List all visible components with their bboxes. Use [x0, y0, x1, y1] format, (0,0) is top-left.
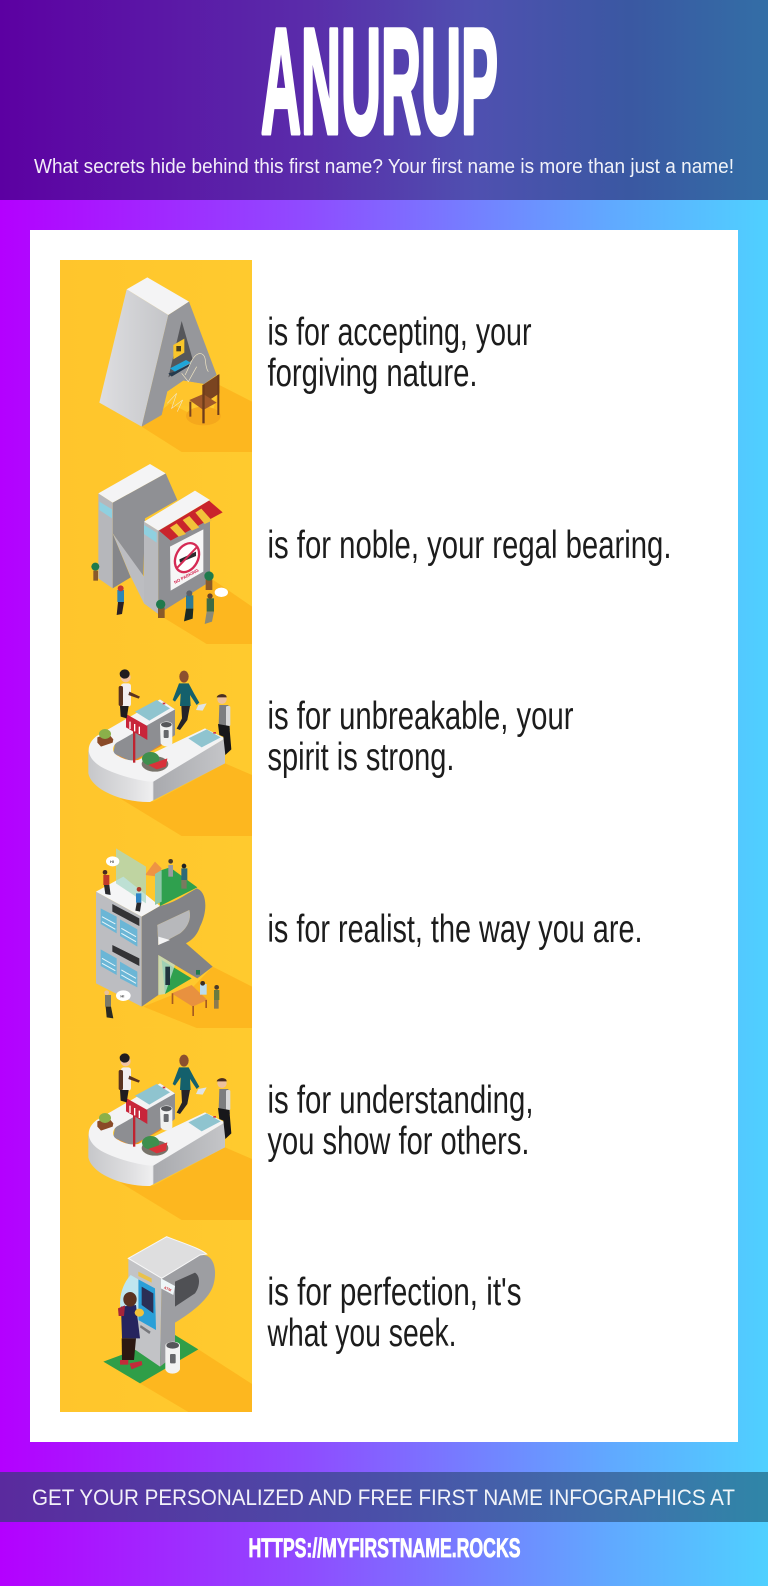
white content panel — [30, 230, 738, 1442]
tile: letter P: ATM — [163, 1286, 172, 1292]
text: A line: is for accepting, your — [268, 311, 532, 354]
tile: letter U — [60, 644, 252, 836]
text: A line — [268, 311, 532, 395]
text: U line 2: is for understanding, — [268, 1079, 534, 1122]
tile: letter R — [60, 836, 252, 1028]
text: P line — [267, 1271, 522, 1355]
footer band — [0, 1472, 768, 1522]
icon strip — [60, 260, 252, 1412]
subtitle: What secrets hide behind this first name? Your first name is more than just a name! — [34, 155, 734, 178]
text: P line: is for perfection, it's — [268, 1271, 522, 1314]
text: U line 2: you show for others. — [268, 1120, 530, 1163]
text: U line 2 — [268, 1079, 534, 1163]
text: U line — [268, 695, 574, 779]
text: R line: is for realist, the way you are. — [268, 908, 642, 951]
tile: letter R: HI — [110, 859, 114, 864]
tile: letter N — [60, 452, 252, 644]
tile: letter N: NO PARKING — [173, 567, 200, 585]
tile: letter U (repeat) — [60, 1028, 252, 1220]
tile: letter P — [60, 1220, 252, 1412]
text: U line: is for unbreakable, your — [268, 695, 574, 738]
tile: letter R: HI — [120, 993, 124, 998]
tile: letter A — [60, 260, 252, 452]
text: U line: spirit is strong. — [268, 736, 454, 779]
text: A line: forgiving nature. — [268, 352, 478, 395]
footer url: HTTPS://MYFIRSTNAME.ROCKS — [248, 1533, 520, 1563]
text: P line: what you seek. — [267, 1312, 456, 1355]
header band — [0, 0, 768, 200]
